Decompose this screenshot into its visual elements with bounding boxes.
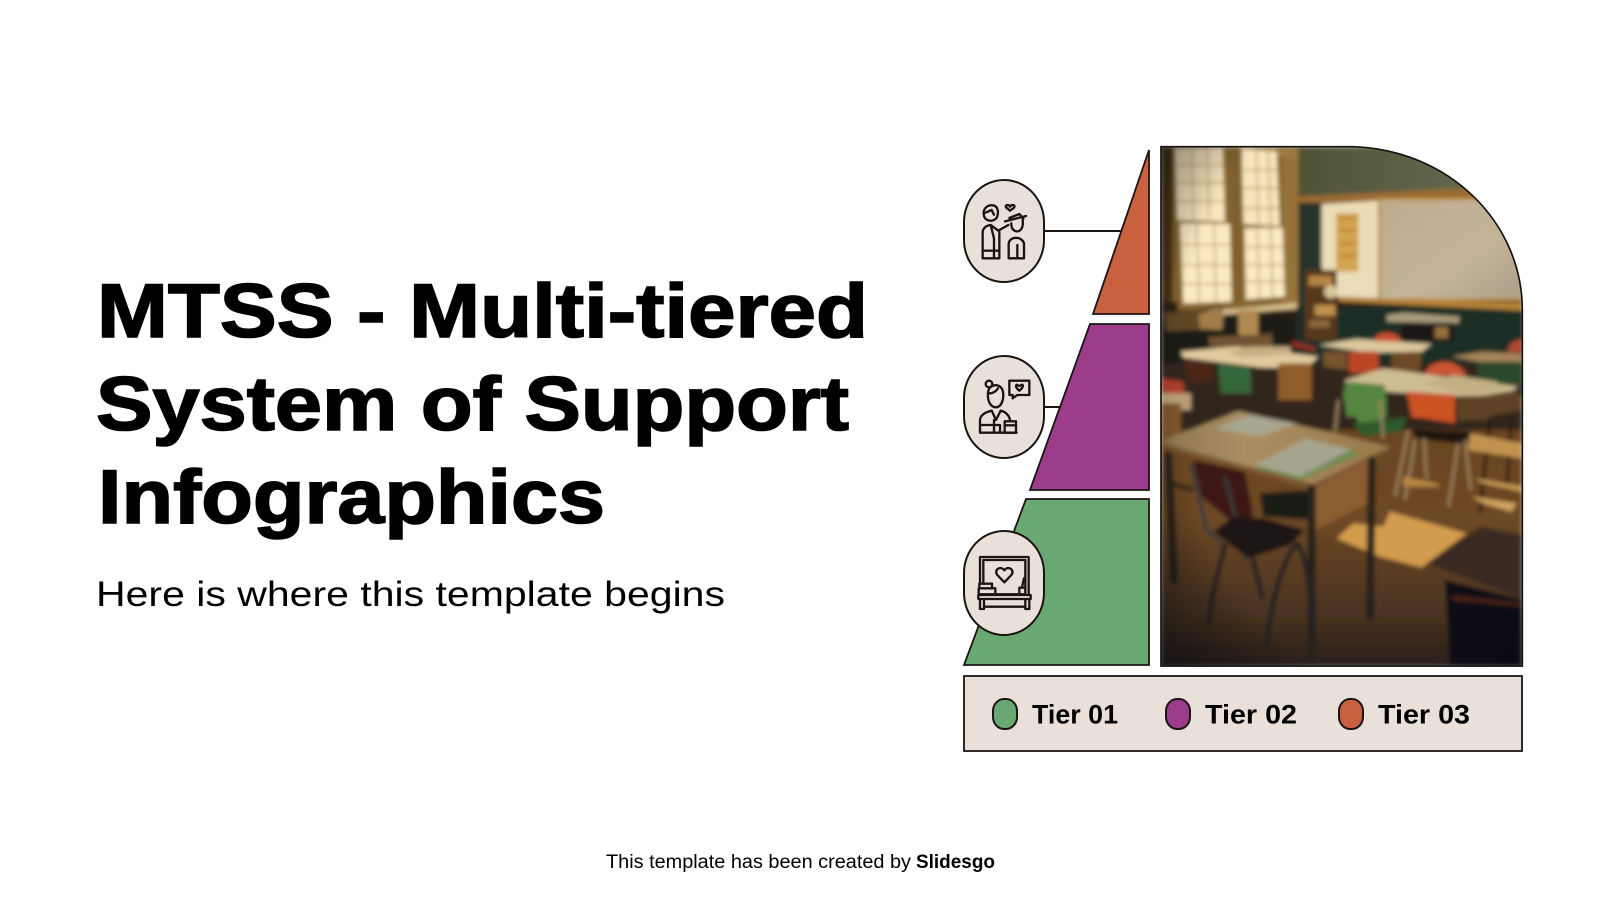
pyramid tier 03 bbox=[1093, 150, 1149, 314]
legend: tier 03 bbox=[1339, 699, 1470, 730]
classroom photo bbox=[1161, 147, 1523, 667]
footer credit: This template has been created by bbox=[606, 852, 912, 873]
legend panel bbox=[964, 676, 1522, 751]
icon pill: desk with heart board bbox=[964, 531, 1044, 635]
legend: tier 01: Tier 01 bbox=[1032, 700, 1118, 730]
connector: tier 03 bbox=[1044, 230, 1122, 232]
pyramid tier 01 bbox=[964, 499, 1149, 665]
pyramid tier 02 bbox=[1030, 324, 1149, 490]
title: MTSS - Multi-tiered bbox=[97, 269, 868, 354]
subtitle: Here is where this template begins bbox=[96, 575, 725, 614]
title: System of Support bbox=[96, 362, 849, 447]
legend: tier 03: Tier 03 bbox=[1378, 700, 1470, 730]
title: Infographics bbox=[98, 455, 605, 540]
connector: tier 02 bbox=[1044, 406, 1062, 408]
icon pill: teacher and student bbox=[964, 180, 1044, 282]
icon pill: counsellor with speech bubble bbox=[964, 356, 1044, 458]
legend: tier 01 bbox=[993, 699, 1118, 730]
footer credit: Slidesgo bbox=[916, 852, 995, 873]
legend: tier 02: Tier 02 bbox=[1205, 700, 1297, 730]
legend: tier 02 bbox=[1166, 699, 1297, 730]
title bbox=[96, 269, 868, 540]
